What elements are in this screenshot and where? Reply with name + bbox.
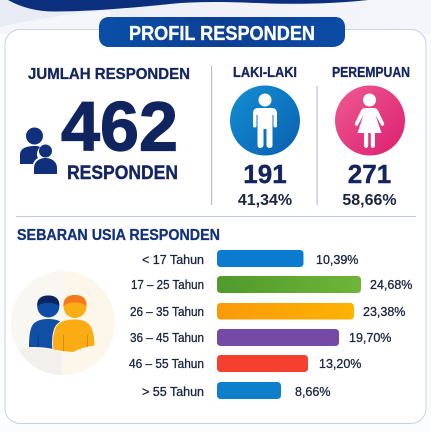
row: 36-45: 36 – 45 Tahun	[130, 331, 204, 345]
title banner: PROFIL RESPONDEN	[129, 23, 315, 45]
heading: age distribution: SEBARAN USIA RESPONDEN	[17, 227, 220, 244]
icon: male	[230, 86, 300, 156]
row: over 55	[142, 382, 330, 399]
percent: male: 41,34%	[238, 192, 292, 209]
row: 46-55: 13,20%	[319, 357, 361, 371]
heading: jumlah responden: JUMLAH RESPONDEN	[28, 66, 190, 83]
row: 26-35: 23,38%	[363, 305, 405, 319]
panel: male	[230, 64, 300, 209]
row: 46-55: 46 – 55 Tahun	[129, 357, 204, 371]
percent: female: 58,66%	[342, 192, 397, 209]
icon: people	[20, 128, 57, 174]
row: 46-55	[129, 355, 361, 372]
row: 36-45	[130, 329, 391, 346]
header swoosh	[0, 0, 431, 34]
illustration: two people	[11, 271, 115, 375]
count: female: 271	[348, 159, 391, 189]
row: over 55: > 55 Tahun	[142, 385, 204, 399]
count: male: 191	[243, 159, 287, 189]
panel: female	[332, 64, 410, 209]
icon: female	[335, 86, 405, 156]
row: 26-35	[130, 303, 405, 320]
row: over 55: 8,66%	[295, 385, 330, 399]
row: 17-25	[131, 276, 412, 293]
row: under 17: 10,39%	[316, 253, 358, 267]
chart: age distribution	[129, 250, 412, 399]
heading: laki-laki: LAKI-LAKI	[233, 64, 297, 81]
row: 26-35: 26 – 35 Tahun	[130, 305, 204, 319]
total number: 462	[61, 88, 178, 166]
row: 36-45: 19,70%	[349, 331, 391, 345]
panel: total respondents	[20, 66, 190, 184]
divider	[16, 216, 416, 217]
divider	[211, 66, 212, 205]
title banner	[99, 17, 345, 47]
heading: perempuan: PEREMPUAN	[332, 64, 410, 81]
row: 17-25: 24,68%	[370, 278, 412, 292]
label: responden: RESPONDEN	[67, 163, 178, 184]
row: under 17	[142, 250, 358, 267]
row: under 17: < 17 Tahun	[142, 253, 204, 267]
divider	[316, 86, 318, 205]
row: 17-25: 17 – 25 Tahun	[131, 278, 204, 292]
